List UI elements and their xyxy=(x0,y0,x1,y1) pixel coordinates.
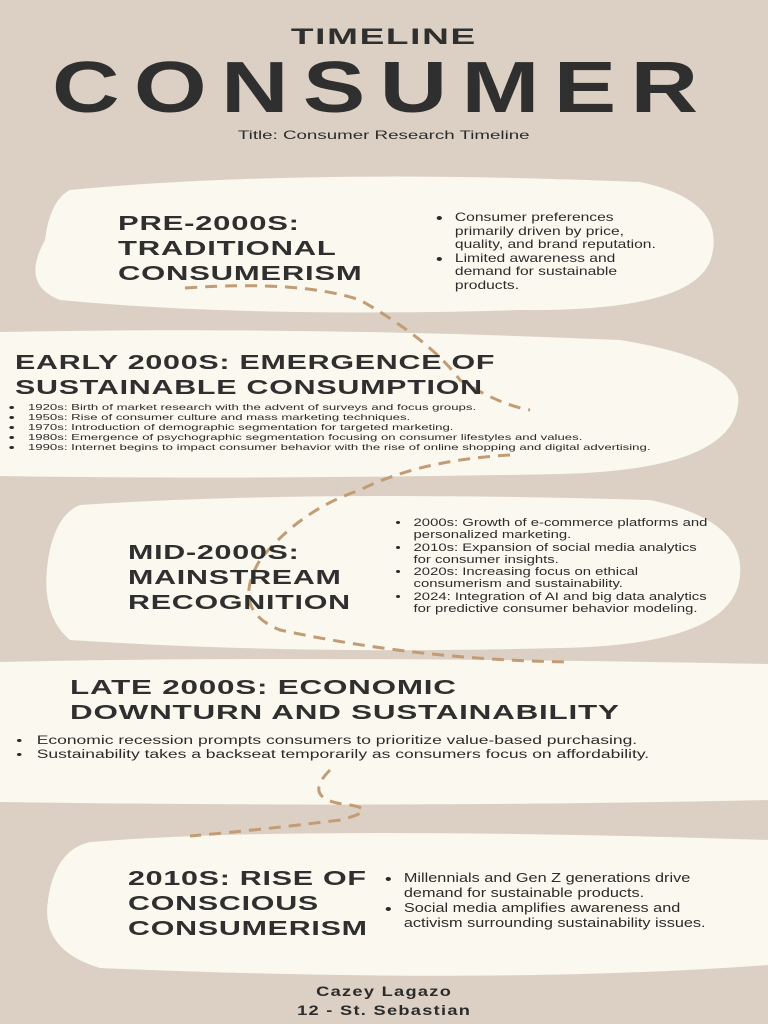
panel: early 2000s bullets: 1950s: Rise of consumer culture and mass marketing techniques. xyxy=(28,412,410,422)
footer: author: Cazey Lagazo xyxy=(316,983,452,999)
panel: 2010s bullets: Social media amplifies awareness and activism surrounding sustainability issues. xyxy=(404,901,706,930)
panel: pre-2000s heading xyxy=(118,213,362,285)
panel: late 2000s heading: DOWNTURN AND SUSTAINABILITY xyxy=(70,702,620,724)
panel: early 2000s bullets: 1970s: Introduction of demographic segmentation for targeted marketing. xyxy=(28,422,453,432)
panel: pre-2000s heading: CONSUMERISM xyxy=(118,263,362,285)
panel: 2010s bullets xyxy=(386,871,706,930)
panel: late 2000s bullets xyxy=(17,735,649,760)
panel: late 2000s heading: LATE 2000S: ECONOMIC xyxy=(70,677,457,699)
title: consumer: CONSUMER xyxy=(52,48,712,128)
panel: early 2000s bullets: 1980s: Emergence of psychographic segmentation focusing on consumer lifestyles and values. xyxy=(28,432,582,442)
panel: early 2000s heading: EARLY 2000S: EMERGENCE OF xyxy=(15,352,495,374)
panel: mid-2000s bullets: 2010s: Expansion of social media analytics for consumer insights. xyxy=(414,542,697,566)
panel: late 2000s heading xyxy=(70,677,620,724)
panel: late 2000s bullets: Sustainability takes a backseat temporarily as consumers focus on affordability. xyxy=(37,748,649,760)
panel: mid-2000s heading: RECOGNITION xyxy=(128,592,351,614)
panel: 2010s heading xyxy=(128,868,368,940)
panel: early 2000s bullets: 1920s: Birth of market research with the advent of surveys and focus groups. xyxy=(28,402,476,412)
panel: pre-2000s heading: PRE-2000S: xyxy=(118,213,300,235)
panel: mid-2000s bullets: 2024: Integration of AI and big data analytics for predictive consumer behavior modeling. xyxy=(414,591,707,615)
heading: timeline: TIMELINE xyxy=(291,24,477,49)
footer: author: 12 - St. Sebastian xyxy=(297,1002,471,1018)
panel: mid-2000s bullets xyxy=(396,517,707,615)
panel: mid-2000s bullets: 2020s: Increasing focus on ethical consumerism and sustainability. xyxy=(414,566,638,590)
panel: early 2000s bullets xyxy=(9,402,650,452)
panel: pre-2000s heading: TRADITIONAL xyxy=(118,238,337,260)
panel: mid-2000s heading xyxy=(128,542,351,614)
subtitle: Title: Consumer Research Timeline xyxy=(238,128,530,142)
panel: pre-2000s bullets: Limited awareness and demand for sustainable products. xyxy=(455,250,617,292)
panel: 2010s heading: CONSUMERISM xyxy=(128,918,368,940)
panel: mid-2000s heading: MAINSTREAM xyxy=(128,567,342,589)
panel: early 2000s bullets: 1990s: Internet begins to impact consumer behavior with the rise of online shopping and digital advertising. xyxy=(28,442,650,452)
panel: 2010s bullets: Millennials and Gen Z generations drive demand for sustainable products. xyxy=(404,871,690,900)
panel: mid-2000s heading: MID-2000S: xyxy=(128,542,299,564)
panel: early 2000s heading xyxy=(15,352,495,399)
panel: late 2000s bullets: Economic recession prompts consumers to prioritize value-based purchasing. xyxy=(37,735,637,747)
panel: mid-2000s bullets: 2000s: Growth of e-commerce platforms and personalized marketing. xyxy=(414,517,707,541)
panel: pre-2000s bullets xyxy=(436,210,656,292)
panel: early 2000s heading: SUSTAINABLE CONSUMPTION xyxy=(15,377,483,399)
panel: 2010s heading: 2010S: RISE OF xyxy=(128,868,367,890)
panel: pre-2000s bullets: Consumer preferences primarily driven by price, quality, and brand reputation. xyxy=(455,210,656,251)
panel: 2010s heading: CONSCIOUS xyxy=(128,893,319,915)
footer: author xyxy=(297,983,471,1018)
